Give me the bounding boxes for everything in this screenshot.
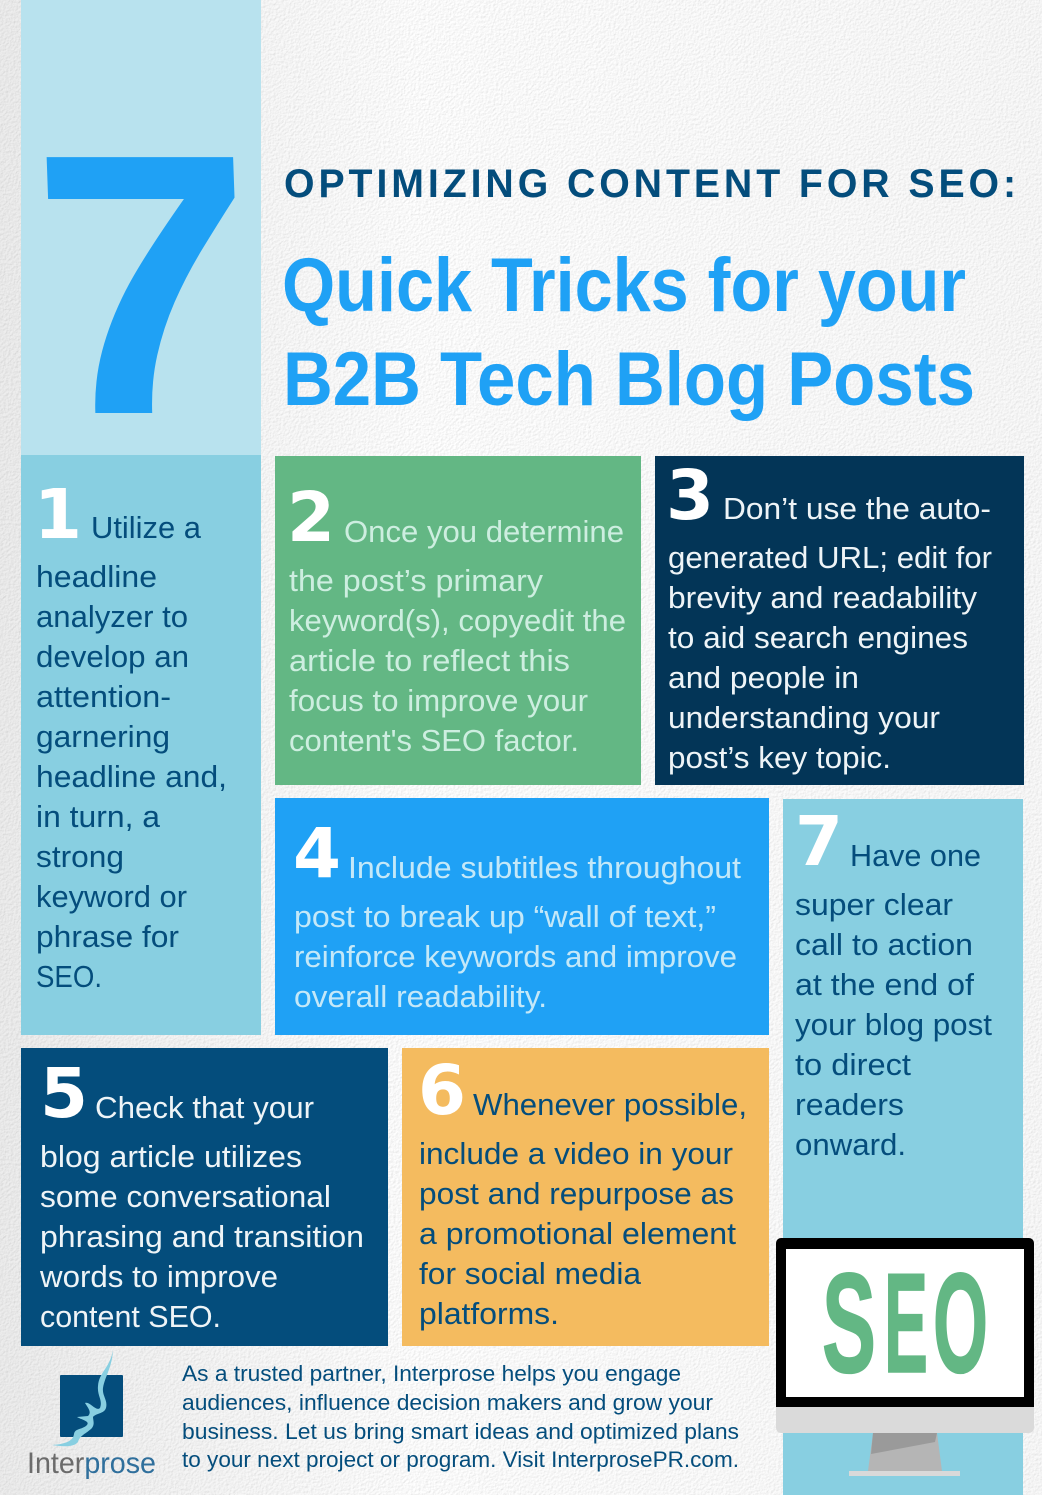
tip 6 text: Whenever possible, xyxy=(473,1087,747,1122)
tip 7 text: to direct xyxy=(795,1047,911,1082)
panel: tip 3 xyxy=(655,456,1024,785)
SEO screen text: O xyxy=(933,1244,988,1403)
tip 7 text: your blog post xyxy=(795,1007,992,1042)
panel: tip 6 xyxy=(402,1048,769,1346)
heading: subtitle: OPTIMIZING CONTENT FOR SEO: xyxy=(284,162,1020,206)
tip 7 text: super clear xyxy=(795,887,953,922)
tip 4 text: Include subtitles throughout xyxy=(348,850,741,885)
header panel: big number 7 xyxy=(21,0,262,492)
footer text: As a trusted partner, Interprose helps you engage xyxy=(182,1361,681,1386)
tip 7 text xyxy=(795,838,992,1162)
tip 5 text: blog article utilizes xyxy=(40,1139,302,1174)
number 2: 2 xyxy=(287,478,335,558)
tip 2 text: keyword(s), copyedit the xyxy=(289,603,626,638)
tip 3 text: brevity and readability xyxy=(668,580,978,615)
tip 6 text: platforms. xyxy=(419,1296,559,1331)
tip 1 text: analyzer to xyxy=(36,599,188,634)
tip 2 text: focus to improve your xyxy=(289,683,588,718)
tip 2 text xyxy=(289,514,626,758)
tip 5 text: phrasing and transition xyxy=(40,1219,364,1254)
number 6: 6 xyxy=(418,1051,466,1131)
tip 7 text: readers xyxy=(795,1087,904,1122)
panel: tip 2 xyxy=(275,456,641,785)
heading: title: B2B Tech Blog Posts xyxy=(283,337,975,422)
tip 1 text: in turn, a xyxy=(36,799,161,834)
tip 1 text: Utilize a xyxy=(91,510,202,545)
tip 3 text: to aid search engines xyxy=(668,620,968,655)
tip 1 text: attention- xyxy=(36,679,171,714)
tip 6 text: post and repurpose as xyxy=(419,1176,734,1211)
tip 1 text: phrase for xyxy=(36,919,179,954)
tip 7 text: at the end of xyxy=(795,967,974,1002)
logo square xyxy=(60,1375,123,1437)
number 3: 3 xyxy=(666,456,714,536)
monitor body xyxy=(776,1238,1034,1433)
tip 2 text: article to reflect this xyxy=(289,643,570,678)
tip 5 text: some conversational xyxy=(40,1179,331,1214)
SEO screen text: E xyxy=(884,1244,928,1403)
tip 3 text: and people in xyxy=(668,660,859,695)
tip 1 text: strong xyxy=(36,839,124,874)
tip 3 text: post’s key topic. xyxy=(668,740,891,775)
panel: tip 7 xyxy=(783,799,1023,1495)
tip 4 text xyxy=(294,850,741,1014)
footer text: business. Let us bring smart ideas and optimized plans xyxy=(182,1419,739,1444)
tip 5 text: content SEO. xyxy=(40,1299,221,1334)
tip 1 text: headline xyxy=(36,559,157,594)
tip 5 text: Check that your xyxy=(95,1090,314,1125)
logo ribbon face profile xyxy=(52,1350,113,1446)
tip 2 text: content's SEO factor. xyxy=(289,723,579,758)
SEO screen text xyxy=(822,1244,988,1403)
tip 4 text: overall readability. xyxy=(294,979,547,1014)
tip 3 text: generated URL; edit for xyxy=(668,540,992,575)
panel: tip 5 xyxy=(21,1048,388,1346)
logo wordmark: Interprose xyxy=(27,1447,156,1480)
tip 1 text: develop an xyxy=(36,639,189,674)
tip 6 text: for social media xyxy=(419,1256,642,1291)
tip 3 text: Don’t use the auto- xyxy=(723,491,991,526)
tip 1 text: headline and, xyxy=(36,759,227,794)
heading: title xyxy=(282,243,975,422)
footer text xyxy=(182,1361,739,1472)
tip 5 text xyxy=(39,1090,364,1334)
tip 1 text: keyword or xyxy=(36,879,187,914)
tip 3 text: understanding your xyxy=(668,700,940,735)
tip 2 text: Once you determine xyxy=(344,514,624,549)
number 7: 7 xyxy=(795,802,843,882)
SEO screen text: S xyxy=(822,1244,876,1403)
tip 7 text: onward. xyxy=(795,1127,906,1162)
tip 6 text xyxy=(419,1087,747,1331)
tip 6 text: a promotional element xyxy=(419,1216,736,1251)
heading: title: Quick Tricks for your xyxy=(282,243,966,328)
tip 3 text xyxy=(668,491,992,775)
footer text: to your next project or program. Visit InterprosePR.com. xyxy=(182,1447,739,1472)
tip 7 text: Have one xyxy=(850,838,981,873)
monitor stand xyxy=(849,1433,960,1476)
panel: tip 4 xyxy=(275,798,769,1035)
footer text: audiences, influence decision makers and grow your xyxy=(182,1390,713,1415)
tip 1 text: garnering xyxy=(36,719,170,754)
number 1: 1 xyxy=(34,475,82,555)
tip 4 text: post to break up “wall of text,” xyxy=(294,899,716,934)
logo: Interprose xyxy=(27,1350,156,1480)
tip 4 text: reinforce keywords and improve xyxy=(294,939,737,974)
tip 7 text: call to action xyxy=(795,927,973,962)
tip 1 text: SEO. xyxy=(36,959,102,994)
tip 6 text: include a video in your xyxy=(419,1136,733,1171)
number 4: 4 xyxy=(293,814,341,894)
number 5: 5 xyxy=(40,1054,88,1134)
tip 1 text xyxy=(36,510,227,994)
tip 2 text: the post’s primary xyxy=(289,563,544,598)
icon: SEO monitor xyxy=(776,1238,1034,1476)
tip 5 text: words to improve xyxy=(39,1259,278,1294)
panel: tip 1 xyxy=(21,455,261,1035)
big numeral 7: 7 xyxy=(27,76,262,492)
